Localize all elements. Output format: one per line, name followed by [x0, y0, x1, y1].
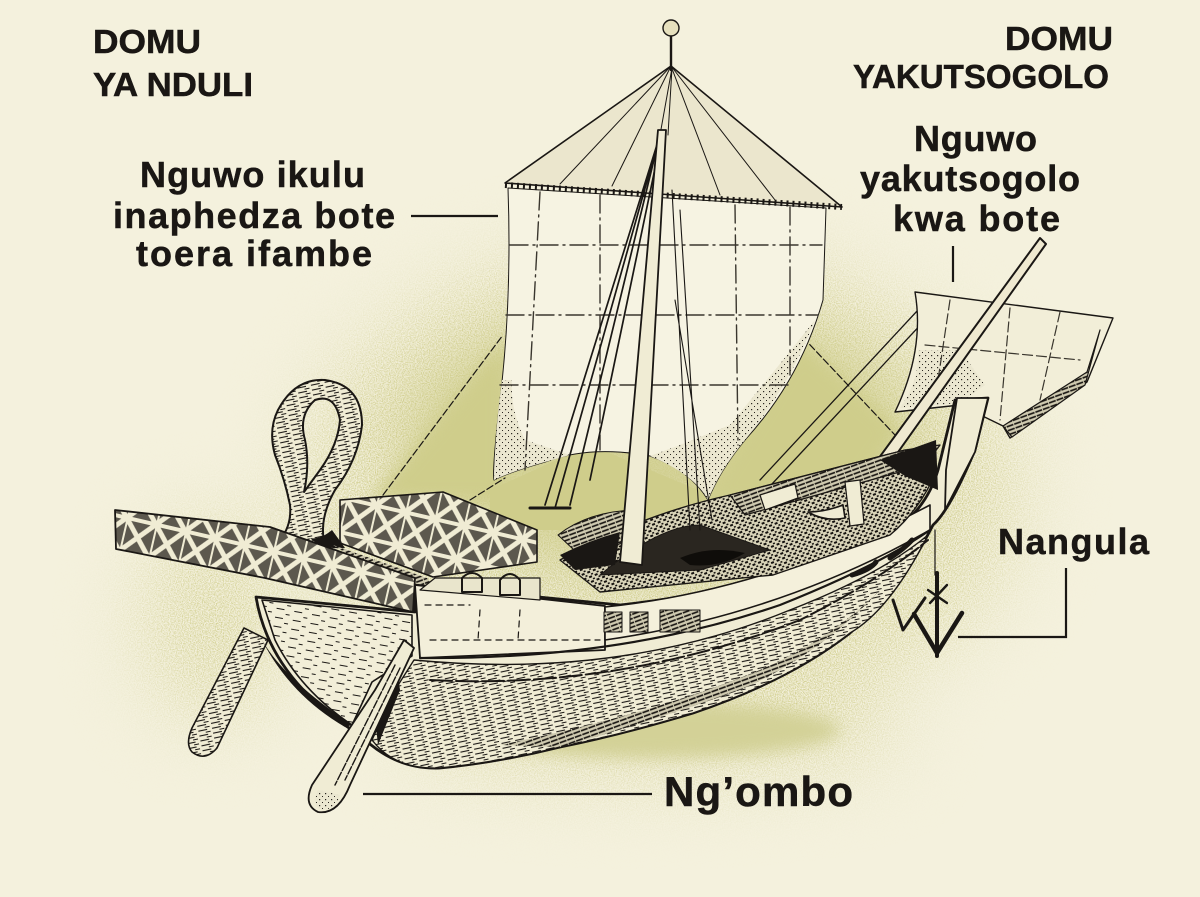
label: fore sail: kwa bote [893, 198, 1060, 239]
label: domu: DOMU [1005, 20, 1113, 57]
label: domu ya nduli: DOMU [93, 23, 201, 60]
label: main sail [113, 154, 395, 274]
label: ya nduli: YA NDULI [93, 66, 253, 103]
deck [558, 440, 940, 592]
bowsprit [854, 238, 1046, 500]
label: yakutsogolo: YAKUTSOGOLO [853, 58, 1109, 95]
label: fore sail: Nguwo [914, 118, 1037, 159]
label: main sail: inaphedza bote [113, 195, 395, 236]
main mast [620, 130, 666, 565]
forward sail [895, 292, 1113, 438]
stern ornament [272, 380, 362, 556]
rigging lines [383, 330, 895, 500]
label: fore sail: yakutsogolo [860, 158, 1080, 199]
rigging to mast [530, 68, 712, 530]
oar: rear [188, 628, 268, 756]
green glow behind the boat [145, 250, 1020, 775]
main sail [494, 188, 826, 500]
leader line: main sail [411, 215, 498, 217]
fore stays [760, 310, 925, 484]
masthead ball [663, 20, 679, 70]
anchor [893, 530, 962, 656]
leader line: oar [363, 793, 652, 795]
stern cabin [333, 492, 540, 600]
label: fore sail [860, 118, 1080, 239]
oar: front [309, 640, 414, 812]
stern gallery rail [115, 510, 415, 612]
label: oar: Ng’ombo [664, 768, 853, 815]
boat illustration [115, 20, 1113, 812]
leader line: fore sail [952, 246, 954, 282]
label: main sail: Nguwo ikulu [140, 154, 365, 195]
dark aft edge [262, 640, 400, 745]
hull [256, 398, 988, 768]
label: main sail: toera ifambe [136, 233, 372, 274]
label: anchor: Nangula [998, 521, 1150, 562]
leader line: anchor [958, 568, 1066, 637]
top sail [505, 66, 842, 207]
